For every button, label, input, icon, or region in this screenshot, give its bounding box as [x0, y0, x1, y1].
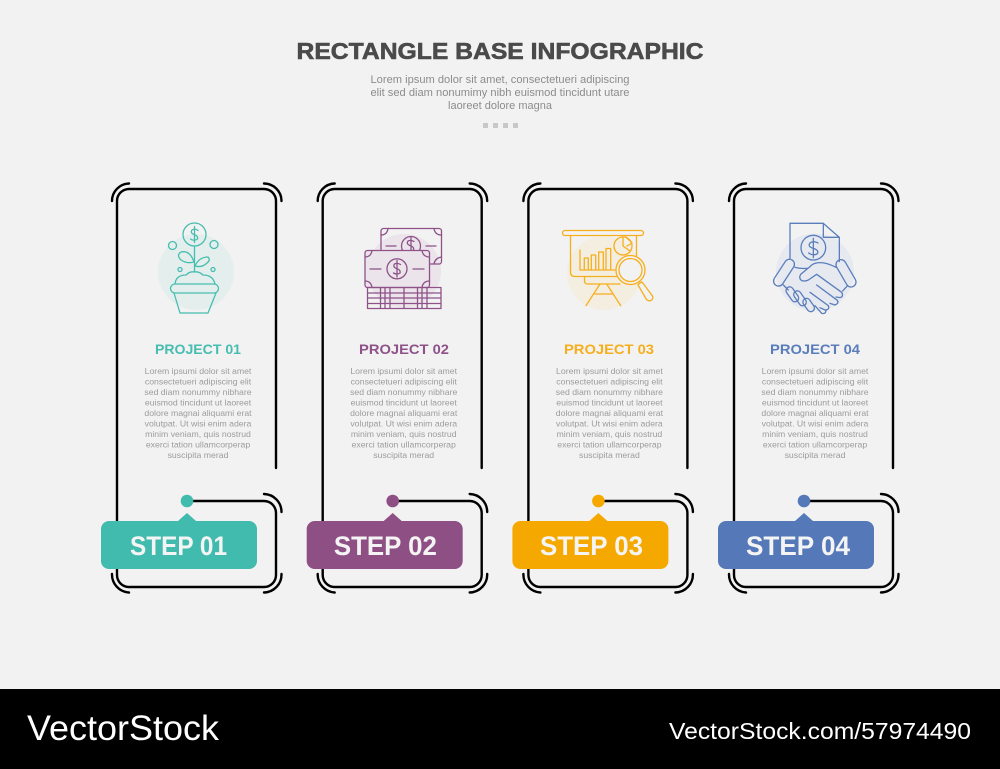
- text block: volutpat. Ut wisi enim adera: [556, 418, 663, 428]
- text block: dolore magnai aliquami erat: [556, 408, 664, 418]
- panel: project 02: [307, 184, 487, 592]
- subtitle text: laoreet dolore magna: [448, 100, 553, 112]
- text block: suscipita merad: [785, 450, 846, 460]
- panel: project 03: [512, 184, 693, 592]
- footer bar: [0, 689, 1000, 769]
- step badge: STEP 04: [746, 531, 850, 561]
- connector dot: [181, 495, 193, 507]
- footer bar: VectorStock.com/57974490: [669, 718, 971, 744]
- panel: project 01: [101, 184, 282, 592]
- heading: PROJECT 03: [564, 341, 654, 357]
- text block: Lorem ipsumi dolor sit amet: [762, 366, 869, 376]
- connector dot: [798, 495, 810, 507]
- subtitle text: [370, 74, 630, 112]
- card frame: [729, 184, 899, 592]
- text block: volutpat. Ut wisi enim adera: [350, 418, 457, 428]
- text block: dolore magnai aliquami erat: [144, 408, 252, 418]
- text block: exerci tation ullamcorperap: [557, 440, 662, 450]
- connector dot: [592, 495, 605, 507]
- text block: minim veniam, quis nostrud: [557, 429, 662, 439]
- icon: handshake with document: [772, 223, 858, 314]
- heading: PROJECT 04: [770, 341, 860, 357]
- step badge: [101, 513, 257, 569]
- card frame: [318, 184, 487, 592]
- card frame: [523, 184, 693, 592]
- card frame: [112, 184, 282, 592]
- text block: [556, 366, 664, 460]
- step badge: STEP 03: [540, 531, 643, 561]
- text block: suscipita merad: [168, 450, 229, 460]
- text block: suscipita merad: [579, 450, 640, 460]
- text block: sed diam nonummy nibhare: [144, 387, 252, 397]
- text block: minim veniam, quis nostrud: [351, 429, 457, 439]
- text block: Lorem ipsumi dolor sit amet: [145, 366, 252, 376]
- step badge: STEP 02: [334, 531, 437, 561]
- text block: sed diam nonummy nibhare: [556, 387, 663, 397]
- text block: sed diam nonummy nibhare: [350, 387, 457, 397]
- text block: euismod tincidunt ut laoreet: [762, 398, 869, 408]
- text block: suscipita merad: [373, 450, 434, 460]
- text block: dolore magnai aliquami erat: [350, 408, 458, 418]
- text block: sed diam nonummy nibhare: [761, 387, 869, 397]
- text block: [761, 366, 869, 460]
- text block: minim veniam, quis nostrud: [762, 429, 868, 439]
- step badge: [307, 513, 463, 569]
- text block: exerci tation ullamcorperap: [146, 440, 250, 450]
- step badge: STEP 01: [130, 531, 227, 561]
- step badge: [512, 513, 668, 569]
- text block: consectetueri adipiscing elit: [145, 376, 252, 386]
- text block: consectetueri adipiscing elit: [351, 376, 457, 386]
- icon: plant with coin: [158, 223, 234, 313]
- text block: consectetueri adipiscing elit: [556, 376, 663, 386]
- icon: presentation board with magnifier: [562, 230, 653, 310]
- footer bar: VectorStock: [27, 709, 220, 748]
- text block: consectetueri adipiscing elit: [762, 376, 869, 386]
- step badge: [718, 513, 874, 569]
- panel: project 04: [718, 184, 899, 592]
- text block: euismod tincidunt ut laoreet: [351, 398, 457, 408]
- text block: volutpat. Ut wisi enim adera: [145, 418, 252, 428]
- heading: PROJECT 01: [155, 341, 241, 357]
- icon: banknotes: [365, 228, 442, 308]
- text block: volutpat. Ut wisi enim adera: [762, 418, 869, 428]
- connector dot: [386, 495, 399, 507]
- text block: euismod tincidunt ut laoreet: [556, 398, 663, 408]
- text block: dolore magnai aliquami erat: [761, 408, 869, 418]
- heading: PROJECT 02: [359, 341, 449, 357]
- text block: minim veniam, quis nostrud: [145, 429, 251, 439]
- subtitle text: elit sed diam nonumimy nibh euismod tincidunt utare: [370, 87, 630, 99]
- subtitle text: Lorem ipsum dolor sit amet, consectetueri adipiscing: [370, 74, 630, 86]
- text block: [350, 366, 458, 460]
- text block: exerci tation ullamcorperap: [763, 440, 867, 450]
- text block: Lorem ipsumi dolor sit amet: [350, 366, 458, 376]
- text block: euismod tincidunt ut laoreet: [145, 398, 252, 408]
- text block: Lorem ipsumi dolor sit amet: [556, 366, 663, 376]
- title: RECTANGLE BASE INFOGRAPHIC: [296, 38, 704, 64]
- title dots: [483, 123, 518, 128]
- text block: exerci tation ullamcorperap: [352, 440, 456, 450]
- text block: [144, 366, 252, 460]
